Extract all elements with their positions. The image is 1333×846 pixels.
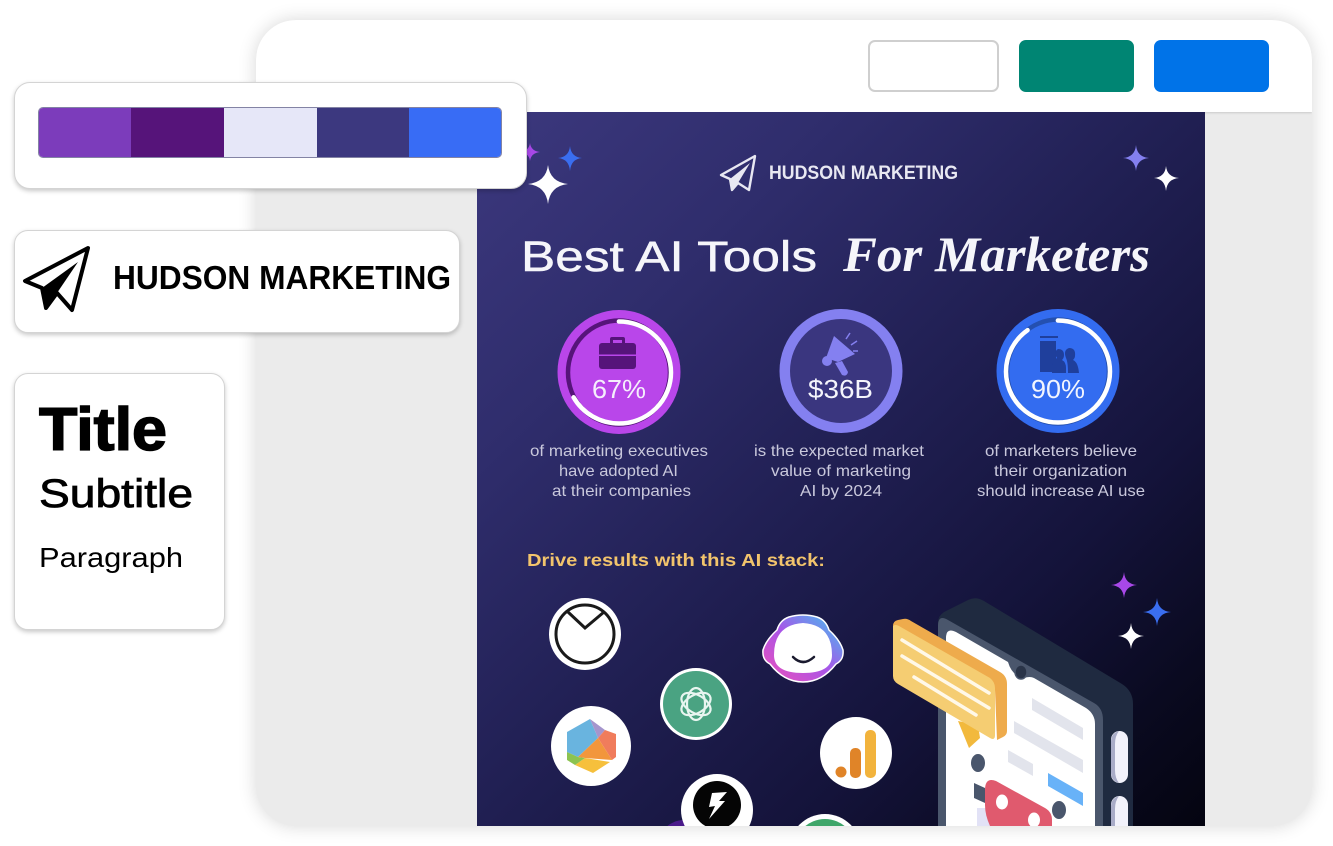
- poster background: [477, 112, 1205, 826]
- screen content bars: [1032, 698, 1083, 740]
- tool: green logo: [789, 814, 861, 846]
- stat: 67%: of marketing executives: [530, 443, 708, 460]
- icon: paper plane: [25, 248, 88, 310]
- stat: $36B: $36B: [808, 374, 873, 404]
- stack heading: Drive results with this AI stack:: [527, 550, 825, 570]
- stat: 90%: of marketers believe: [985, 443, 1137, 460]
- panel: typography: [14, 373, 225, 630]
- title sample: Title: [39, 396, 167, 463]
- stat: 90%: their organization: [994, 463, 1127, 480]
- poster title: [521, 226, 1150, 282]
- stat: 90%: should increase AI use: [977, 483, 1145, 500]
- stat: 90%: [977, 309, 1145, 500]
- sparkles top left: [520, 143, 582, 204]
- stat: $36B: value of marketing: [771, 463, 911, 480]
- tool: hexagon logo: [551, 706, 631, 786]
- side buttons: [1111, 731, 1128, 783]
- phone back: [938, 598, 1133, 826]
- icon: megaphone: [822, 333, 858, 376]
- sparkles lower right: [1111, 572, 1171, 649]
- brand name: HUDSON MARKETING: [113, 259, 451, 296]
- smartphone illustration: [893, 598, 1133, 846]
- tool: clock logo: [549, 598, 621, 670]
- sparkles top right: [1123, 145, 1179, 191]
- red card: [974, 783, 985, 803]
- toolbar: [256, 20, 1312, 112]
- infographic poster: [477, 112, 1205, 826]
- chat bubble: [893, 619, 1007, 748]
- stat: 67%: at their companies: [552, 483, 691, 500]
- camera notch: [1015, 665, 1027, 679]
- stat: 67%: [530, 310, 708, 500]
- panel: brand logo: [14, 230, 460, 333]
- stat: $36B: is the expected market: [754, 443, 925, 460]
- stat: $36B: AI by 2024: [800, 483, 882, 500]
- toolbar button: green: [1019, 40, 1134, 92]
- stat: 67%: 67%: [592, 374, 646, 404]
- poster title: Best AI Tools: [521, 233, 817, 281]
- paragraph sample: Paragraph: [39, 542, 183, 573]
- tool: analytics logo: [820, 717, 892, 789]
- stat: $36B: [754, 309, 925, 500]
- tool: lightning logo: [658, 774, 753, 846]
- avatar dots: [971, 754, 985, 772]
- poster title: For Marketers: [842, 226, 1150, 282]
- toolbar button: blue: [1154, 40, 1269, 92]
- app window frame: [256, 20, 1312, 826]
- stat: 67%: have adopted AI: [559, 463, 678, 480]
- colour swatches: [38, 107, 502, 158]
- tool: ChatGPT logo: [660, 668, 732, 740]
- tool: Jasper logo: [763, 615, 843, 682]
- subtitle sample: Subtitle: [39, 472, 193, 516]
- poster logo: [721, 156, 958, 190]
- phone front: [938, 618, 1103, 826]
- phone screen: [946, 630, 1095, 826]
- stat: 90%: 90%: [1031, 374, 1085, 404]
- panel: colour palette: [14, 82, 527, 189]
- icon: briefcase: [599, 337, 636, 369]
- icon: building and people: [1040, 336, 1079, 373]
- toolbar button: white: [868, 40, 999, 92]
- poster logo: HUDSON MARKETING: [769, 163, 958, 184]
